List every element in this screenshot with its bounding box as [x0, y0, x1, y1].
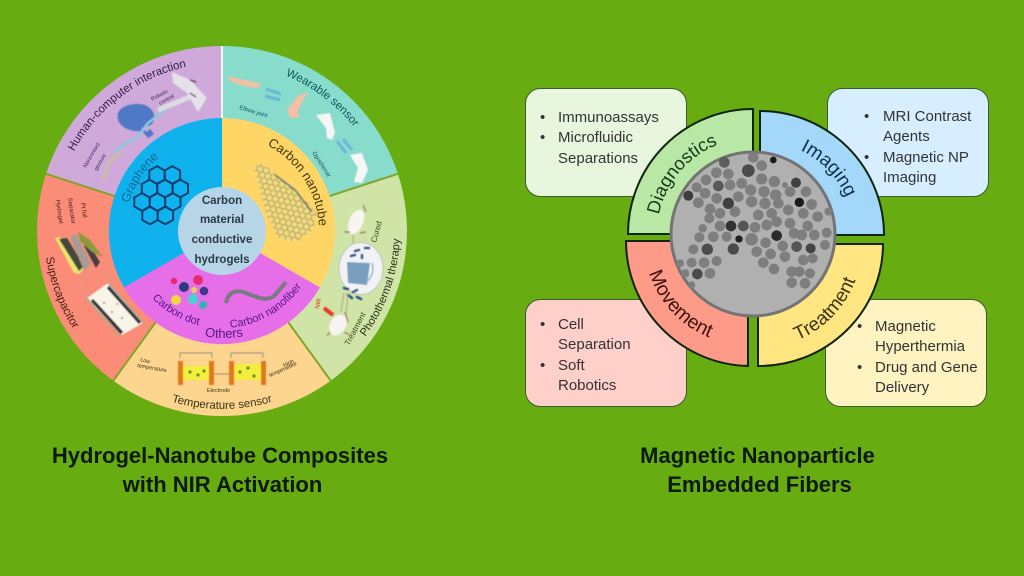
label: low and high temperature, electrode: Electrode: [207, 388, 230, 394]
text box: movement: Robotics: [558, 377, 616, 394]
text box: treatment: Hyperthermia: [875, 338, 966, 355]
sector: human-computer interaction: [46, 46, 222, 196]
label: elbow joint and opisthenar: [238, 105, 331, 179]
text box: movement: Separation: [558, 336, 631, 353]
quadrant: diagnostics: Diagnostics: [646, 136, 716, 214]
text box: diagnostics: •: [540, 109, 545, 126]
text box: movement: •: [540, 316, 545, 333]
label: Pt foil, separator, hydrogel: [54, 197, 87, 224]
icon: carbon dots: [171, 275, 208, 309]
title: right: Magnetic Nanoparticle: [640, 443, 875, 468]
micrograph: nanoparticles: [671, 152, 835, 316]
icon: elbow and hand sensors: [227, 76, 368, 183]
icon: electrodes: [178, 353, 266, 385]
sector: human-computer interaction: Human-computer interaction: [68, 61, 186, 151]
center label: carbon material conductive hydrogels: material: [200, 214, 244, 226]
label: noncontact gesture: control: [158, 94, 176, 107]
quadrant: imaging: [759, 110, 885, 236]
sector: others: Carbon dot: [154, 294, 200, 326]
quadrant: movement: Movement: [649, 269, 713, 338]
quadrant: movement: [625, 240, 749, 367]
text box: treatment: Magnetic: [875, 318, 936, 335]
text box: imaging: MRI Contrast: [883, 108, 972, 125]
icon: graphene hexagon lattice: [134, 166, 188, 224]
center label: carbon material conductive hydrogels: conductive: [192, 234, 252, 246]
text box: treatment: Drug and Gene: [875, 359, 978, 376]
panel: carbon material wheel: [37, 46, 407, 416]
text box: movement: •: [540, 357, 545, 374]
quadrant: diagnostics: [627, 108, 754, 235]
label: noncontact gesture: [83, 89, 176, 172]
quadrant: treatment: Treatment: [792, 276, 856, 338]
label: elbow joint and opisthenar: Elbow joint: [238, 105, 268, 119]
text box: treatment: •: [857, 359, 862, 376]
icon: battery layers: [55, 232, 143, 336]
label: NIR, treatment and cured: Cured: [369, 220, 384, 244]
label: NIR, treatment and cured: [315, 220, 384, 347]
title: left: with NIR Activation: [122, 472, 322, 497]
text box: movement: Soft: [558, 357, 586, 374]
text box: treatment: Delivery: [875, 379, 930, 396]
text box: movement: Cell: [558, 316, 584, 333]
sector: wearable sensor: [222, 46, 398, 196]
icon: carbon nanotube: [253, 163, 317, 242]
label: low and high temperature, electrode: temperature: [137, 363, 167, 374]
sector: carbon nanotube: [222, 118, 335, 288]
text box: treatment: •: [857, 318, 862, 335]
text box: diagnostics: •: [540, 129, 545, 146]
text box: imaging: Imaging: [883, 169, 936, 186]
sector: others: [124, 253, 320, 344]
label: noncontact gesture: Noncontact: [83, 141, 102, 169]
sector: carbon nanotube: Carbon nanotube: [269, 139, 327, 226]
text box: imaging: Magnetic NP: [883, 149, 969, 166]
sector: temperature sensor: [113, 322, 331, 416]
label: NIR, treatment and cured: Treatment: [343, 310, 368, 347]
text box: diagnostics: [526, 88, 686, 196]
sector: wearable sensor: Wearable sensor: [288, 68, 359, 126]
icon: treatment cycle with mice: [324, 205, 383, 339]
text box: imaging: •: [864, 108, 869, 125]
quadrant: imaging: Imaging: [802, 139, 855, 197]
text box: diagnostics: Microfluidic: [558, 129, 634, 146]
sector: graphene: [108, 118, 222, 288]
sector: photothermal therapy: Photothermal therapy: [360, 238, 402, 336]
icon: brain and robot arm: [104, 72, 207, 180]
label: low and high temperature, electrode: [137, 357, 298, 394]
text box: diagnostics: Immunoassays: [558, 109, 659, 126]
text box: imaging: [828, 88, 988, 196]
text box: imaging: •: [864, 149, 869, 166]
text box: movement: [526, 300, 686, 406]
sector: graphene: Graphene: [122, 154, 158, 202]
label: elbow joint and opisthenar: Opisthenar: [310, 151, 331, 179]
center label: carbon material conductive hydrogels: Carbon: [202, 195, 242, 207]
title: left: Hydrogel-Nanotube Composites: [52, 443, 388, 468]
icon: carbon nanofiber: [226, 282, 286, 303]
sector: supercapacitor: [37, 174, 184, 381]
sector: temperature sensor: Temperature sensor: [174, 394, 271, 410]
label: Pt foil, separator, hydrogel: Pt foil: [79, 202, 87, 218]
quadrant: treatment: [757, 243, 884, 367]
center label: carbon material conductive hydrogels: hydrogels: [195, 254, 249, 266]
label: low and high temperature, electrode: High: [282, 359, 295, 369]
title: right: Embedded Fibers: [667, 472, 852, 497]
text box: diagnostics: Separations: [558, 150, 638, 167]
label: Pt foil, separator, hydrogel: Hydrogel: [54, 199, 63, 224]
sector: others: Others: [206, 328, 243, 338]
sector: others: Carbon nanofiber: [230, 283, 300, 328]
label: low and high temperature, electrode: temperature: [268, 361, 298, 379]
text box: treatment: [826, 300, 986, 406]
label: noncontact gesture: Robotic: [150, 89, 170, 103]
label: noncontact gesture: gesture: [94, 153, 108, 172]
center label: carbon material conductive hydrogels: [178, 187, 266, 275]
label: low and high temperature, electrode: Low: [140, 357, 151, 365]
panel: magnetic nanoparticle diagram: [525, 88, 989, 407]
label: NIR, treatment and cured: NIR: [315, 297, 323, 309]
sector: photothermal therapy: [260, 174, 407, 381]
sector: supercapacitor: Supercapacitor: [46, 257, 78, 328]
label: Pt foil, separator, hydrogel: Separator: [66, 197, 76, 224]
text box: imaging: Agents: [883, 128, 930, 145]
